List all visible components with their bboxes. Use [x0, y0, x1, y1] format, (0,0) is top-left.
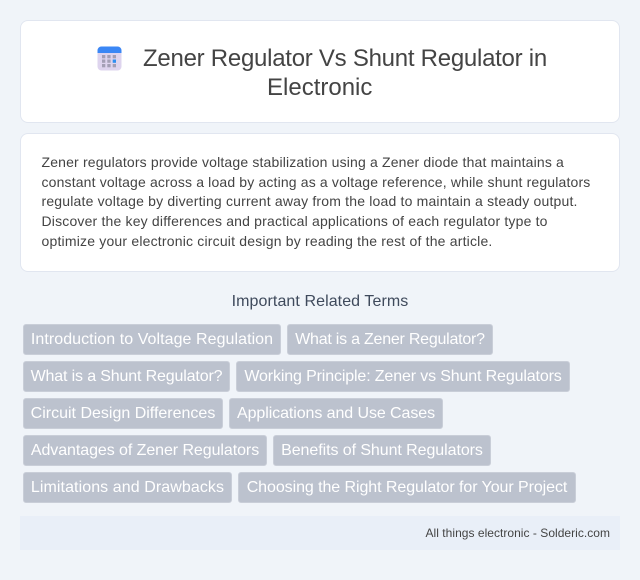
icon: calendar	[98, 46, 122, 70]
tag	[273, 435, 491, 466]
tag: Circuit Design Differences	[31, 405, 215, 422]
tag: What is a Shunt Regulator?	[31, 368, 222, 385]
title	[143, 45, 547, 101]
tag: Choosing the Right Regulator for Your Project	[247, 479, 567, 496]
text block: description: regulate voltage by diverting current away from the load to maintain a steady output.	[42, 193, 578, 209]
tag	[23, 324, 281, 355]
title: Electronic	[267, 74, 372, 101]
title: Zener Regulator Vs Shunt Regulator in	[143, 45, 547, 72]
tag	[229, 398, 443, 429]
tag	[287, 324, 493, 355]
tag	[23, 435, 267, 466]
tag	[236, 361, 570, 392]
text block: description	[42, 154, 590, 249]
tag: Advantages of Zener Regulators	[31, 442, 259, 459]
heading: related terms: Important Related Terms	[232, 293, 408, 310]
panel: header card	[20, 20, 620, 123]
footer text: All things electronic - Solderic.com	[426, 526, 610, 540]
tag: Limitations and Drawbacks	[31, 479, 224, 496]
tag: Applications and Use Cases	[237, 405, 435, 422]
text block: description: optimize your electronic circuit design by reading the rest of the article.	[42, 233, 493, 249]
tag: Introduction to Voltage Regulation	[31, 331, 273, 348]
panel: description	[20, 133, 620, 272]
tag: Working Principle: Zener vs Shunt Regulators	[244, 368, 562, 385]
tag	[23, 472, 232, 503]
text block: description: constant voltage across a load by acting as a voltage reference, while shunt regulators	[42, 174, 590, 190]
text block: description: Discover the key differences and practical applications of each regulator type to	[42, 213, 548, 229]
tag	[23, 398, 223, 429]
tag	[238, 472, 576, 503]
footer	[20, 516, 620, 550]
tag: Benefits of Shunt Regulators	[281, 442, 483, 459]
tag: What is a Zener Regulator?	[295, 331, 485, 348]
text block: description: Zener regulators provide voltage stabilization using a Zener diode that maintains a	[42, 154, 564, 170]
panel: term tags	[23, 324, 576, 503]
tag	[23, 361, 230, 392]
